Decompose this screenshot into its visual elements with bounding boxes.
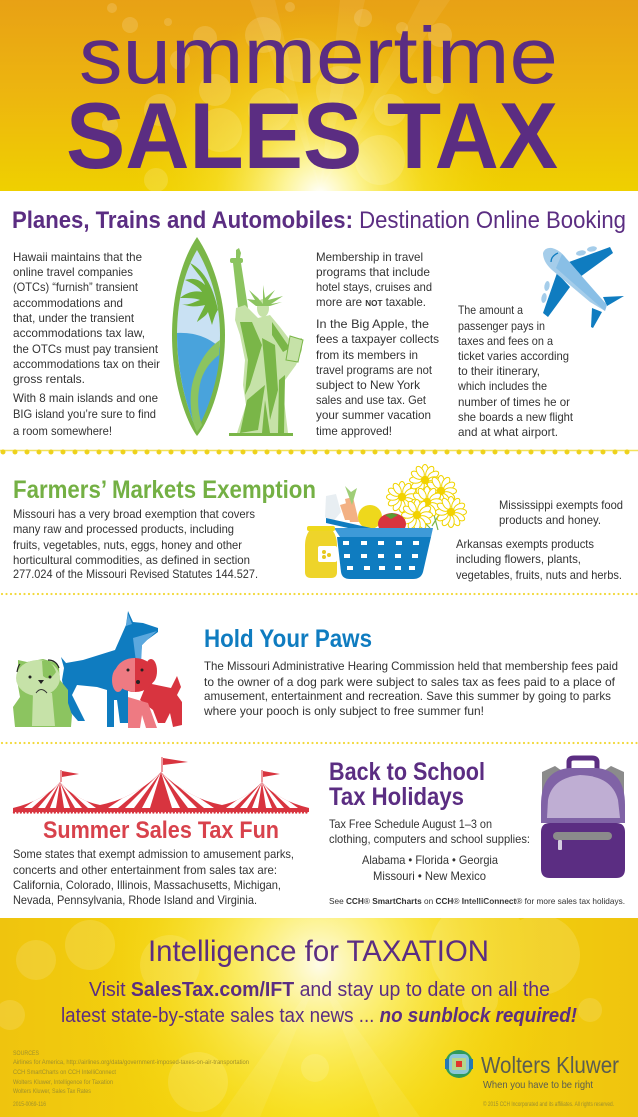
text block: Hawaii: online travel companies xyxy=(13,265,133,279)
text block: dog park: The Missouri Administrative Hearing Commission held that membership fees paid xyxy=(204,659,618,673)
text block: Mississippi: Mississippi exempts food xyxy=(499,498,623,512)
text block: amusement: concerts and other entertainment from sales tax are: xyxy=(13,863,277,877)
icon: globe xyxy=(445,1050,473,1078)
logo: Wolters Kluwer: When you have to be right xyxy=(483,1079,593,1091)
icon: green bulldog xyxy=(13,659,72,727)
text block: Hawaii: a room somewhere! xyxy=(13,424,112,438)
icon: blue dog xyxy=(61,611,158,727)
text block: Missouri exemption: horticultural commodities, as defined in section xyxy=(13,553,250,567)
text block: Hawaii: With 8 main islands and one xyxy=(13,391,158,405)
text block: Missouri exemption xyxy=(13,507,258,581)
text block: Mississippi xyxy=(499,498,623,527)
text block: sources xyxy=(13,1051,249,1108)
text block: passenger taxes xyxy=(457,303,574,439)
text block: Missouri exemption: Missouri has a very broad exemption that covers xyxy=(13,507,255,521)
text block: membership in travel programs: Membership in travel xyxy=(316,250,423,264)
text block: sources: CCH SmartCharts on CCH IntelliConnect xyxy=(13,1070,116,1076)
text block: passenger taxes: number of times he or xyxy=(458,395,570,409)
text block: membership in travel programs: from its members in xyxy=(316,348,418,362)
text block: dog park xyxy=(203,659,618,718)
callout: visit salestax.com: Visit SalesTax.com/IFT and stay up to date on all the xyxy=(89,979,550,1001)
text block: Hawaii: Hawaii maintains that the xyxy=(13,250,142,264)
logo: Wolters Kluwer xyxy=(445,1050,619,1091)
heading: intelligence for taxation: Intelligence for TAXATION xyxy=(148,935,489,968)
text block: Hawaii: that, under the transient xyxy=(13,311,135,325)
heading: back to school tax holidays: Back to School xyxy=(329,758,485,786)
text block: Arkansas: vegetables, fruits, nuts and herbs. xyxy=(456,568,622,582)
text block: membership in travel programs xyxy=(316,250,439,438)
text block: sources: Airlines for America, http://airlines.org/data/government-imposed-taxes-on-air-transportation xyxy=(13,1060,249,1066)
text block: membership in travel programs: more are NOT taxable. xyxy=(316,295,426,309)
text block: Missouri exemption: fruits, vegetables, nuts, eggs, honey and other xyxy=(13,538,242,552)
text block: Arkansas: including flowers, plants, xyxy=(456,552,581,566)
text block: passenger taxes: which includes the xyxy=(457,379,547,393)
text block: tax free schedule xyxy=(329,817,530,883)
icon: airplane xyxy=(541,246,624,328)
text block: Hawaii: accommodations and xyxy=(13,296,123,310)
text block: Missouri exemption: many raw and processed products, including xyxy=(13,522,234,536)
heading: summer sales tax fun: Summer Sales Tax Fun xyxy=(43,817,279,844)
heading: back to school tax holidays xyxy=(329,758,485,811)
text block: passenger taxes: and at what airport. xyxy=(458,425,558,439)
text block: membership in travel programs: fees a taxpayer collects xyxy=(316,332,439,346)
text block: dog park: amusement, entertainment and recreation. Save this summer by going to parks xyxy=(204,689,611,703)
text block: amusement xyxy=(13,847,294,907)
logo: Wolters Kluwer: Wolters Kluwer xyxy=(481,1052,619,1078)
text block: membership in travel programs: programs that include xyxy=(316,265,430,279)
text block: passenger taxes: passenger pays in xyxy=(458,319,545,333)
text block: sources: Wolters Kluwer, Sales Tax Rates xyxy=(13,1089,91,1095)
text block: Hawaii: accommodations tax law, xyxy=(13,326,145,340)
heading: farmers' markets exemption: Farmers’ Markets Exemption xyxy=(13,476,316,504)
text block: membership in travel programs: your summer vacation xyxy=(316,408,431,422)
panel: header banner xyxy=(0,0,638,192)
icon: honey jar xyxy=(305,526,337,578)
text block: sources: 2015-0069-116 xyxy=(13,1102,47,1108)
title: summertime: summertime xyxy=(79,11,558,100)
text block: passenger taxes: she boards a new flight xyxy=(458,410,574,424)
text block: amusement: Nevada, Pennsylvania, Rhode Island and Virginia. xyxy=(13,893,257,907)
text: CCH note: See CCH® SmartCharts on CCH® IntelliConnect® for more sales tax holidays. xyxy=(329,896,625,906)
text block: Mississippi: products and honey. xyxy=(499,513,601,527)
text block: Hawaii: BIG island you’re sure to find xyxy=(13,407,156,421)
text block: sources: Wolters Kluwer, Intelligence for Taxation xyxy=(13,1080,113,1086)
text block: membership in travel programs: time approved! xyxy=(316,424,392,438)
text block: tax free schedule: Tax Free Schedule August 1–3 on xyxy=(329,817,492,831)
text block: membership in travel programs: travel programs are not xyxy=(316,363,433,377)
text block: Hawaii: the OTCs must pay transient xyxy=(13,342,159,356)
icon: backpack xyxy=(541,758,625,878)
icon: flowers xyxy=(386,464,466,530)
text block: Hawaii xyxy=(13,250,160,438)
heading: back to school tax holidays: Tax Holidays xyxy=(329,783,464,811)
heading: hold your paws: Hold Your Paws xyxy=(204,625,372,653)
text block: sources: SOURCES xyxy=(13,1051,39,1057)
text block: passenger taxes: ticket varies according xyxy=(458,349,569,363)
text block: tax free schedule: clothing, computers and school supplies: xyxy=(329,832,530,846)
icon: red puppy xyxy=(112,658,182,728)
text block: passenger taxes: The amount a xyxy=(458,303,523,317)
text block: passenger taxes: taxes and fees on a xyxy=(458,334,553,348)
text block: Hawaii: gross rentals. xyxy=(13,372,85,386)
icon: basket with produce and flowers xyxy=(305,464,466,579)
text block: dog park: to the owner of a dog park were subject to sales tax as fees paid to a place of xyxy=(204,675,616,689)
text block: passenger taxes: to their itinerary, xyxy=(458,364,540,378)
icon: statue of liberty xyxy=(229,248,303,436)
text block: tax free schedule: Missouri • New Mexico xyxy=(373,869,486,883)
text block: amusement: Some states that exempt admission to amusement parks, xyxy=(13,847,294,861)
text block: membership in travel programs: hotel stays, cruises and xyxy=(316,280,432,294)
callout: visit salestax.com xyxy=(61,979,577,1027)
text block: dog park: where your pooch is only subject to free summer fun! xyxy=(203,704,484,718)
title: SALES TAX: SALES TAX xyxy=(66,83,558,188)
icon: circus tents xyxy=(13,757,309,812)
text block: Arkansas: Arkansas exempts products xyxy=(456,537,594,551)
text block: membership in travel programs: sales and use tax. Get xyxy=(316,393,427,407)
text block: Hawaii: (OTCs) “furnish” transient xyxy=(13,280,139,294)
text block: membership in travel programs: In the Big Apple, the xyxy=(316,317,429,331)
heading: planes, trains and automobiles: Planes, Trains and Automobiles: Destination Online Booking xyxy=(12,207,626,234)
icon: dogs xyxy=(13,611,182,728)
text block: membership in travel programs: subject to New York xyxy=(316,378,421,392)
callout: visit salestax.com: latest state-by-state sales tax news ... no sunblock required! xyxy=(61,1005,577,1027)
text block: Arkansas xyxy=(456,537,622,582)
text block: Missouri exemption: 277.024 of the Missouri Revised Statutes 144.527. xyxy=(13,567,258,581)
icon: surfboard with palm xyxy=(172,237,225,436)
text block: tax free schedule: Alabama • Florida • Georgia xyxy=(362,853,498,867)
text block: amusement: California, Colorado, Illinois, Massachusetts, Michigan, xyxy=(13,878,281,892)
text block: Hawaii: accommodations tax on their xyxy=(13,357,160,371)
panel: footer banner xyxy=(0,900,638,1117)
